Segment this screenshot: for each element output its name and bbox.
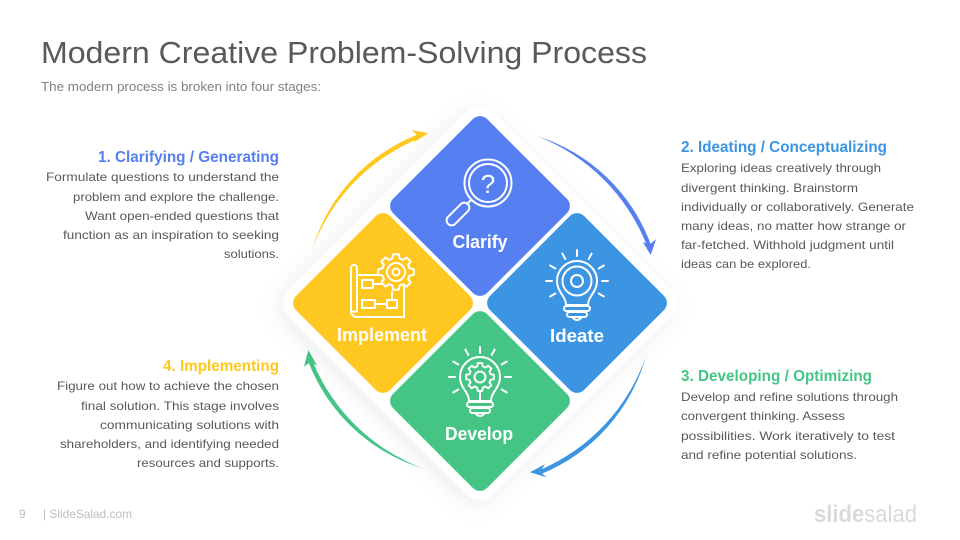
body: clarifying: function as an inspiration to seeking bbox=[63, 228, 279, 242]
body: implementing: shareholders, and identifying needed bbox=[60, 437, 279, 451]
panel: diamond matrix bbox=[275, 98, 685, 508]
body: ideating: divergent thinking. Brainstorm bbox=[681, 181, 858, 195]
subtitle: The modern process is broken into four stages: bbox=[41, 79, 321, 94]
body: clarifying: problem and explore the challenge. bbox=[73, 190, 279, 204]
label: Clarify: Clarify bbox=[452, 232, 508, 252]
title: Modern Creative Problem-Solving Process bbox=[41, 35, 647, 70]
icon: light bulb with gear bbox=[449, 347, 511, 416]
heading: developing: 3. Developing / Optimizing bbox=[681, 368, 872, 385]
label: Ideate: Ideate bbox=[550, 326, 604, 346]
body: implementing: communicating solutions with bbox=[100, 418, 279, 432]
icon: blueprint with gear bbox=[351, 254, 414, 317]
icon: magnifying glass with question mark bbox=[445, 160, 512, 227]
body: developing: Develop and refine solutions through bbox=[681, 390, 898, 404]
heading: implementing: 4. Implementing bbox=[163, 358, 279, 375]
body: implementing bbox=[57, 379, 279, 470]
body: developing: possibilities. Work iteratively to test bbox=[681, 429, 896, 443]
label: Implement: Implement bbox=[337, 325, 427, 345]
body: implementing: resources and supports. bbox=[137, 456, 279, 470]
body: implementing: Figure out how to achieve the chosen bbox=[57, 379, 279, 393]
panel: ideate diamond bbox=[483, 209, 671, 397]
heading: clarifying: 1. Clarifying / Generating bbox=[98, 149, 279, 166]
body: ideating: far-fetched. Withhold judgment until bbox=[681, 238, 894, 252]
body: ideating bbox=[681, 161, 914, 271]
logo wordmark: slidesalad bbox=[814, 501, 917, 528]
panel: develop diamond bbox=[386, 307, 574, 495]
body: clarifying: Want open-ended questions that bbox=[85, 209, 280, 223]
label: Develop: Develop bbox=[445, 424, 513, 444]
arrow: develop to implement bbox=[304, 350, 423, 468]
body: ideating: individually or collaboratively. Generate bbox=[681, 200, 914, 214]
text block: clarifying bbox=[46, 149, 280, 261]
arrow: ideate to develop bbox=[530, 357, 646, 477]
body: developing: convergent thinking. Assess bbox=[681, 409, 845, 423]
page number: 9 bbox=[19, 507, 26, 521]
body: clarifying: solutions. bbox=[224, 247, 279, 261]
body: clarifying bbox=[46, 170, 280, 261]
panel: implement diamond bbox=[289, 209, 477, 397]
heading: ideating: 2. Ideating / Conceptualizing bbox=[681, 139, 887, 156]
icon: light bulb with target bbox=[546, 250, 608, 320]
arrow: clarify to ideate bbox=[537, 136, 656, 255]
body: ideating: many ideas, no matter how strange or bbox=[681, 219, 906, 233]
white diamond backing bbox=[275, 98, 685, 508]
panel: clarify diamond bbox=[386, 112, 574, 300]
arrow: implement to clarify bbox=[312, 130, 428, 248]
body: developing bbox=[681, 390, 898, 462]
body: ideating: ideas can be explored. bbox=[681, 257, 811, 271]
footer source: | SlideSalad.com bbox=[43, 507, 132, 521]
body: developing: and refine potential solutions. bbox=[681, 448, 857, 462]
icon: magnifying glass with question mark: ? bbox=[481, 169, 495, 199]
body: implementing: final solution. This stage involves bbox=[81, 399, 279, 413]
text block: developing bbox=[681, 368, 898, 462]
text block: ideating bbox=[681, 139, 914, 271]
text block: implementing bbox=[57, 358, 279, 470]
body: clarifying: Formulate questions to understand the bbox=[46, 170, 279, 184]
body: ideating: Exploring ideas creatively through bbox=[681, 161, 881, 175]
